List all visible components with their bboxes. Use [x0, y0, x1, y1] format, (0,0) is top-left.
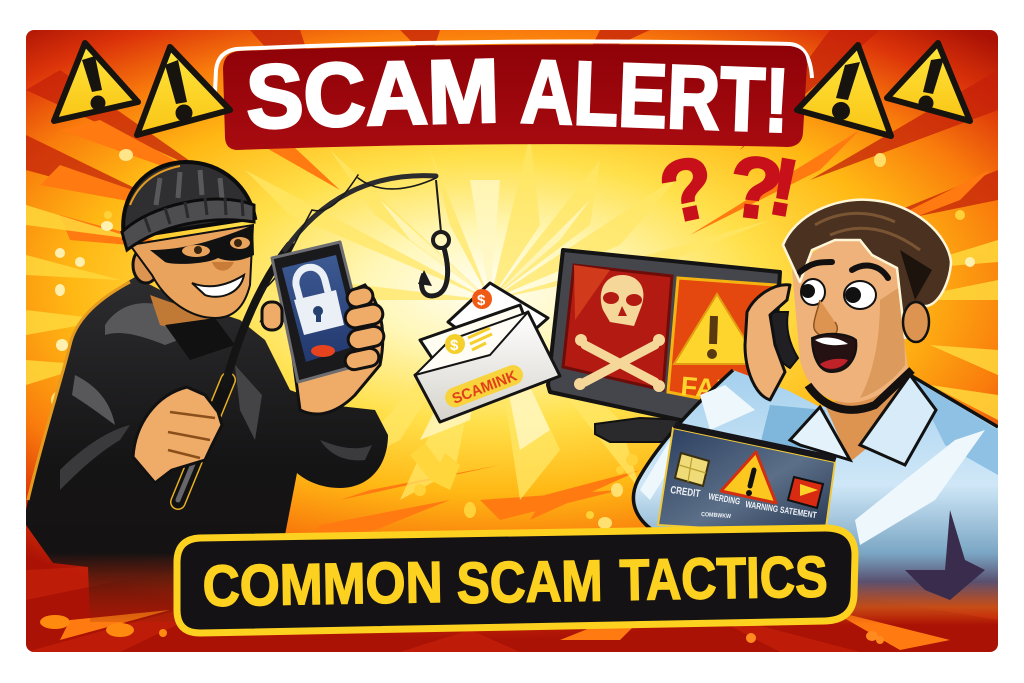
eyes [801, 279, 825, 305]
neck [150, 295, 210, 327]
ear [132, 253, 154, 284]
icon: warning triangle left [137, 47, 230, 135]
face [792, 238, 908, 403]
title word: scam: SCAM [245, 41, 500, 148]
nose [814, 300, 837, 337]
icon: yellow dollar coin [445, 328, 492, 354]
eyebrows [800, 262, 888, 278]
icon: padlock [294, 267, 344, 335]
yellow side streaks [26, 205, 998, 420]
hand behind phone [262, 285, 383, 414]
hair streaks [815, 213, 920, 250]
monitor [548, 250, 780, 442]
envelope label: SCAMINK [450, 367, 520, 408]
card text: COMBWKW [701, 512, 731, 520]
icon: card chip [675, 453, 709, 486]
hair [783, 200, 951, 338]
credit card [658, 422, 837, 535]
orange flecks [40, 149, 975, 644]
phone [262, 242, 386, 414]
eyes [182, 245, 210, 257]
thief [26, 162, 388, 622]
shirt outline [633, 370, 998, 535]
skull panel [563, 265, 672, 392]
icon: warning triangle far left [54, 43, 138, 121]
question and exclamation marks [652, 138, 805, 243]
icon: orange dollar coin [472, 289, 492, 309]
mask [150, 225, 254, 264]
yellow inner rays [230, 135, 770, 500]
subtitle text: SCAM [456, 548, 603, 616]
worried man [633, 200, 998, 625]
subtitle text [202, 544, 828, 619]
pale inner rays [380, 180, 590, 450]
card text: WARNING SATEMENT [745, 499, 818, 520]
icon: skull and crossbones [574, 275, 665, 392]
icon: card warning triangle [721, 452, 776, 503]
icon: warning triangle far right [887, 43, 970, 121]
icon: yellow dollar coin: $ [450, 337, 459, 354]
warning panel: FAI [679, 371, 724, 405]
lips icon [311, 345, 335, 357]
question and exclamation marks: ? [652, 138, 723, 243]
collar [790, 407, 850, 460]
subtitle banner [177, 528, 855, 633]
hoodie [26, 277, 388, 622]
hood rim light [28, 282, 130, 500]
shirt [633, 370, 998, 625]
nose [212, 262, 234, 271]
icon: card flag [788, 477, 823, 508]
shirt blue shoulder [912, 378, 998, 475]
icon: orange dollar coin: $ [477, 292, 486, 309]
card text [670, 484, 818, 520]
hand on phone [745, 285, 790, 400]
fishing rod [178, 175, 436, 502]
fingers [262, 285, 386, 371]
orange rays [40, 120, 990, 650]
monitor stand [595, 418, 690, 442]
neck [826, 388, 900, 462]
phone at ear [771, 312, 798, 368]
question and exclamation marks: ? [724, 138, 788, 239]
hood highlights [60, 303, 372, 490]
ear [903, 302, 929, 342]
thief hand on rod [133, 387, 222, 483]
subtitle text: COMMON [202, 550, 443, 619]
icon: warning triangle right [797, 45, 891, 136]
card text: WERDING [708, 491, 741, 507]
face [130, 225, 253, 318]
warning panel [668, 278, 775, 410]
smile [192, 275, 244, 297]
subtitle text: TACTICS [619, 544, 828, 613]
mouth [812, 334, 856, 372]
icon: monitor warning triangle [674, 294, 760, 364]
jaw shadow [808, 370, 912, 410]
envelope [415, 283, 560, 422]
face shading [860, 285, 905, 398]
question and exclamation marks: ! [763, 141, 805, 233]
shirt highlights [640, 385, 985, 545]
title word: alert: ALERT! [519, 42, 791, 152]
card text: CREDIT [670, 484, 701, 500]
beanie [123, 162, 255, 238]
icon: fishing hook [418, 180, 449, 296]
title banner [215, 41, 812, 152]
shirt shadow folds [905, 510, 985, 600]
